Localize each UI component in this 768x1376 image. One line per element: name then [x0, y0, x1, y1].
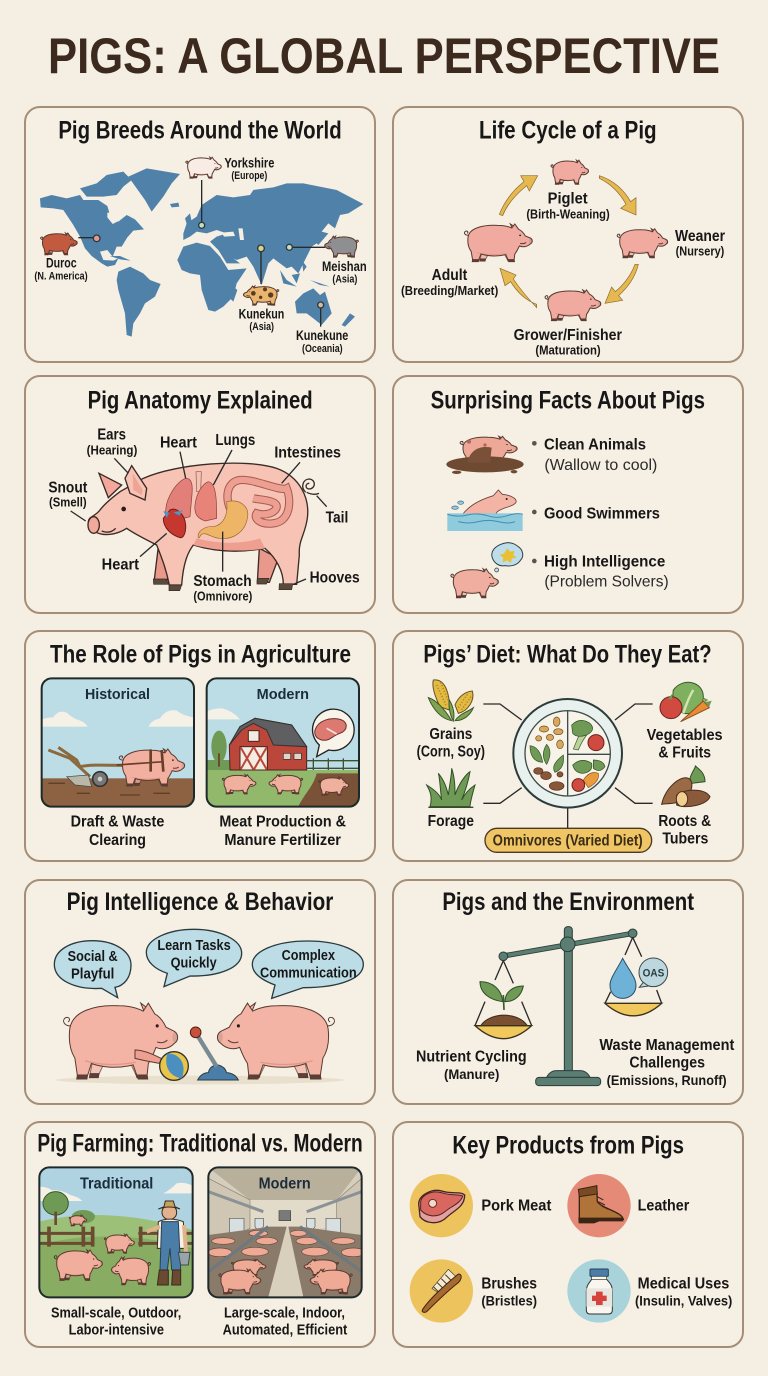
panel: pig anatomy explained	[25, 376, 375, 613]
world map	[40, 168, 363, 337]
panel: key products from pigs	[393, 1122, 743, 1347]
stage: grower/finisher: Grower/Finisher	[514, 327, 622, 344]
right pan: waste management: Waste Management	[599, 1037, 735, 1054]
caption: traditional	[51, 1305, 181, 1338]
stage: grower/finisher	[514, 290, 622, 357]
balance scale	[475, 927, 662, 1086]
item: forage: Forage	[428, 813, 474, 830]
stage: weaner	[617, 228, 725, 259]
caption: historical: Clearing	[89, 832, 146, 849]
scene: historical: Historical	[85, 686, 150, 703]
anatomical pig illustration	[88, 463, 319, 591]
caption: historical: Draft & Waste	[71, 814, 164, 831]
anatomy labels: Hooves	[310, 570, 360, 587]
lever	[190, 1027, 238, 1080]
item: vegetables and fruits	[647, 682, 723, 762]
stage: adult	[401, 224, 532, 298]
heading: environment: Pigs and the Environment	[442, 888, 695, 916]
anatomy labels: Snout	[48, 479, 88, 496]
heading: farming: Pig Farming: Traditional vs. Modern	[37, 1130, 363, 1158]
omnivores pill	[485, 828, 652, 852]
anatomy labels: (Hearing)	[87, 443, 137, 457]
breed: Kunekune	[296, 302, 348, 355]
caption: modern	[223, 1305, 347, 1338]
heading: key products: Key Products from Pigs	[452, 1131, 684, 1159]
breed: Kunekun: Kunekun	[239, 305, 284, 321]
panel: pigs' diet	[393, 631, 743, 861]
bubble: learn tasks quickly: Quickly	[171, 955, 217, 971]
bubble: learn tasks quickly: Learn Tasks	[157, 938, 231, 954]
item: grains	[417, 680, 485, 761]
heading: pig breeds: Pig Breeds Around the World	[58, 116, 342, 144]
fact: high intelligence: High Intelligence	[544, 554, 665, 571]
stage: piglet	[526, 160, 610, 221]
scene: modern	[207, 678, 359, 807]
right pan: waste management	[599, 958, 735, 1088]
product: medical uses: Medical Uses	[638, 1275, 729, 1292]
anatomy labels: Tail	[326, 510, 348, 527]
item: roots and tubers: Tubers	[662, 830, 708, 847]
breed: Duroc: (N. America)	[34, 270, 88, 282]
product: pork meat	[410, 1174, 552, 1237]
heading: life cycle: Life Cycle of a Pig	[479, 116, 657, 144]
item: grains: Grains	[429, 726, 472, 743]
product: brushes: Brushes	[481, 1275, 537, 1292]
breed: Yorkshire	[186, 155, 274, 228]
anatomy labels	[48, 426, 360, 604]
bubble: complex communication: Complex	[282, 948, 336, 964]
breed: Yorkshire: (Europe)	[231, 170, 268, 182]
breed: Kunekune: (Oceania)	[302, 343, 343, 355]
caption: modern: Automated, Efficient	[223, 1322, 347, 1338]
caption: modern: Large-scale, Indoor,	[224, 1305, 345, 1321]
fact: high intelligence	[451, 543, 669, 598]
scene: modern barn: Modern	[259, 1175, 311, 1192]
leader lines	[71, 450, 327, 584]
anatomy labels: Heart	[102, 556, 140, 573]
heading: surprising facts: Surprising Facts About Pigs	[431, 386, 705, 414]
item: roots and tubers	[658, 766, 711, 847]
panel: pig breeds around the world	[25, 107, 375, 362]
fact: clean animals: (Wallow to cool)	[544, 457, 657, 474]
scene: historical	[42, 678, 194, 807]
breed: Kunekun: (Asia)	[249, 321, 274, 333]
breed: Kunekun	[239, 245, 284, 333]
product: medical uses	[567, 1259, 732, 1323]
fact: good swimmers: Good Swimmers	[544, 505, 660, 522]
pig: right	[217, 1003, 334, 1079]
heading: role of pigs: The Role of Pigs in Agriculture	[50, 640, 351, 668]
heading: anatomy: Pig Anatomy Explained	[88, 386, 313, 414]
left pan: nutrient cycling	[416, 982, 532, 1082]
stage: piglet: (Birth-Weaning)	[526, 207, 610, 221]
left pan: nutrient cycling: Nutrient Cycling	[416, 1049, 527, 1066]
caption: modern: Manure Fertilizer	[224, 832, 341, 849]
scene: traditional farm	[39, 1167, 193, 1297]
breed: Kunekune: Kunekune	[296, 327, 348, 343]
item: forage	[427, 768, 475, 830]
stage: piglet: Piglet	[548, 190, 588, 207]
item: vegetables and fruits: Vegetables	[647, 727, 723, 744]
breed: Duroc: Duroc	[46, 255, 77, 271]
product: leather	[567, 1174, 689, 1237]
fact: clean animals	[446, 436, 657, 474]
caption: traditional: Labor-intensive	[69, 1322, 164, 1338]
panel: pigs and the environment	[393, 880, 743, 1104]
bubble: learn tasks quickly	[146, 929, 242, 987]
item: roots and tubers: Roots &	[658, 813, 711, 830]
pig: left with ball	[64, 1003, 188, 1080]
panel: surprising facts about pigs	[393, 376, 743, 613]
breed: Yorkshire: Yorkshire	[224, 155, 274, 171]
fact: clean animals: Clean Animals	[544, 436, 646, 453]
left pan: nutrient cycling: (Manure)	[444, 1066, 499, 1082]
product: brushes	[410, 1259, 537, 1323]
item: vegetables and fruits: & Fruits	[658, 745, 711, 762]
panel: life cycle of a pig	[393, 107, 743, 362]
bubble: social and playful	[54, 941, 131, 998]
breed: Meishan	[286, 236, 367, 285]
anatomy labels: Heart	[160, 435, 198, 452]
scene: traditional farm: Traditional	[80, 1175, 153, 1192]
stage: weaner: Weaner	[675, 228, 725, 245]
anatomy labels: Intestines	[274, 445, 341, 462]
stage: grower/finisher: (Maturation)	[535, 343, 601, 357]
caption: traditional: Small-scale, Outdoor,	[51, 1305, 181, 1321]
anatomy labels: Stomach	[193, 573, 252, 590]
bubble: complex communication: Communication	[260, 965, 357, 981]
anatomy labels: Lungs	[215, 432, 255, 449]
stage: adult: (Breeding/Market)	[401, 284, 498, 298]
stage: weaner: (Nursery)	[676, 245, 724, 259]
product: leather: Leather	[638, 1198, 689, 1215]
bubble: social and playful: Playful	[71, 966, 114, 982]
product: brushes: (Bristles)	[481, 1293, 537, 1309]
right pan: waste management: Challenges	[629, 1054, 705, 1071]
scene: modern barn	[208, 1167, 365, 1297]
panel: pig farming traditional vs modern	[25, 1122, 375, 1347]
scene: modern: Modern	[257, 686, 309, 703]
omnivores pill: Omnivores (Varied Diet)	[493, 833, 643, 850]
bubble: complex communication	[252, 941, 363, 998]
breed: Meishan: Meishan	[322, 258, 367, 274]
breed: Duroc	[34, 233, 100, 282]
fact: high intelligence: (Problem Solvers)	[544, 574, 669, 591]
heading: intelligence: Pig Intelligence & Behavior	[67, 888, 334, 916]
connector lines	[483, 704, 653, 829]
stage: adult: Adult	[432, 267, 468, 284]
fact: good swimmers	[447, 490, 660, 531]
right pan: waste management: OAS	[643, 968, 664, 980]
right pan: waste management: (Emissions, Runoff)	[607, 1072, 727, 1088]
product: pork meat: Pork Meat	[481, 1198, 552, 1215]
caption: modern	[219, 814, 346, 849]
plate	[513, 699, 622, 808]
product: medical uses: (Insulin, Valves)	[635, 1293, 732, 1309]
panel: the role of pigs in agriculture	[25, 631, 375, 861]
anatomy labels: (Smell)	[49, 496, 87, 510]
item: grains: (Corn, Soy)	[417, 744, 485, 761]
anatomy labels: Ears	[97, 426, 126, 443]
breed: Meishan: (Asia)	[332, 273, 358, 285]
caption: modern: Meat Production &	[219, 814, 346, 831]
bubble: social and playful: Social &	[68, 949, 118, 965]
caption: historical	[71, 814, 164, 849]
ground shadow	[56, 1076, 344, 1084]
cycle arrows	[499, 176, 638, 308]
anatomy labels: (Omnivore)	[193, 590, 252, 604]
panel: pig intelligence and behavior	[25, 880, 375, 1104]
